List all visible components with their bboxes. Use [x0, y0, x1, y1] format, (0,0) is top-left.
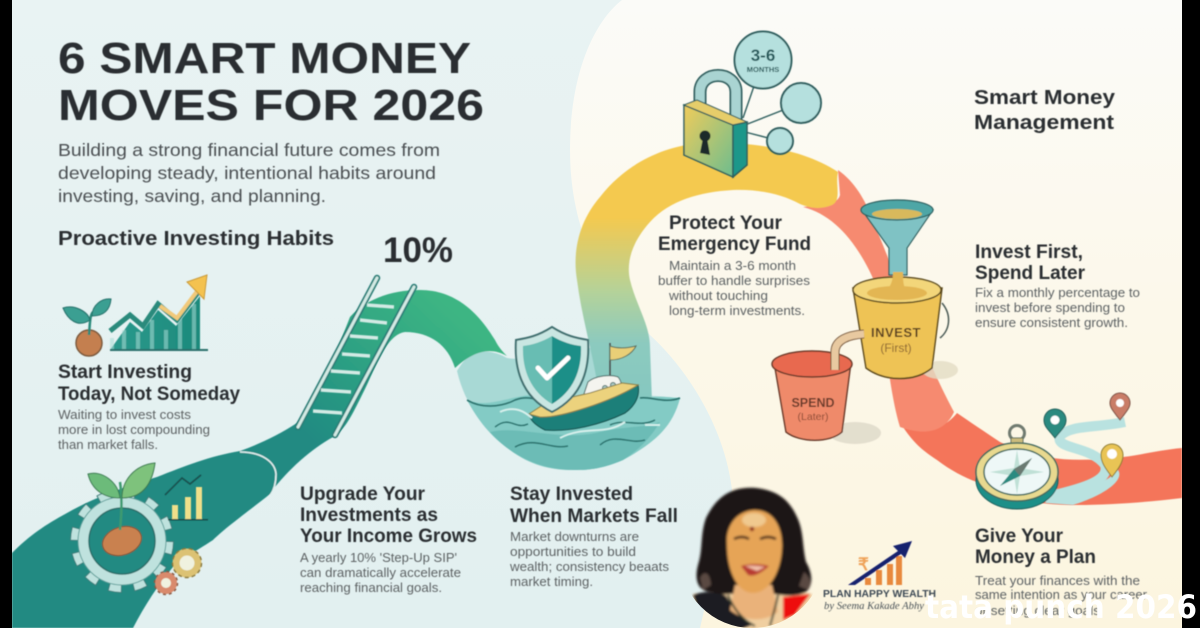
text block: start investing: than market falls.: [58, 437, 158, 452]
icon: spend bucket: SPEND: [791, 396, 835, 410]
ribbon: coral upper section: [803, 170, 954, 432]
text block: invest first: ensure consistent growth.: [975, 315, 1128, 330]
text block: protect emergency fund: [658, 212, 811, 318]
title: [58, 34, 484, 130]
icon: spend bucket: (Later): [798, 411, 828, 423]
text block: upgrade investments: Upgrade Your: [300, 483, 425, 505]
stat: 10%: 10%: [383, 231, 453, 270]
text block: stay invested: When Markets Fall: [510, 505, 678, 527]
logo: plan happy wealth: ₹: [858, 555, 869, 574]
text block: stay invested: Stay Invested: [510, 483, 633, 505]
ribbon: water deep wave: [490, 422, 660, 470]
title: MOVES FOR 2026: [58, 81, 484, 130]
icon: funnel and invest bucket: INVEST: [871, 325, 921, 340]
text block: upgrade investments: Your Income Grows: [300, 525, 477, 547]
text block: give your money a plan: Money a Plan: [975, 546, 1096, 568]
ribbon path: [12, 143, 1182, 628]
text block: stay invested: Market downturns are: [510, 529, 639, 544]
background: cool left side: [0, 0, 732, 628]
icon: padlock with month bubbles: [684, 32, 821, 177]
logo: plan happy wealth: [823, 541, 936, 612]
text block: protect emergency fund: buffer to handle surprises: [658, 273, 811, 288]
icon: ladder: [298, 278, 414, 435]
text block: stay invested: market timing.: [510, 574, 593, 589]
ribbon: teal lower section: [12, 451, 276, 628]
icon: funnel and invest bucket: [835, 200, 958, 379]
icon: gear with seedling: [76, 463, 208, 594]
text block: invest first: Fix a monthly percentage to: [975, 285, 1140, 300]
ribbon: pale teal bowl: [457, 345, 680, 470]
text block: invest first: Spend Later: [975, 262, 1085, 284]
text block: upgrade investments: [300, 483, 477, 595]
text block: smart money management: Smart Money: [974, 87, 1116, 109]
icon: padlock with month bubbles: 3-6: [751, 46, 775, 65]
intro text: developing steady, intentional habits around: [58, 163, 436, 183]
text block: upgrade investments: reaching financial goals.: [300, 580, 442, 595]
text block: protect emergency fund: long-term investments.: [669, 303, 805, 318]
text block: smart money management: [974, 87, 1116, 134]
text block: protect emergency fund: without touching: [668, 288, 768, 303]
title: 6 SMART MONEY: [58, 34, 471, 83]
icon: spend bucket: [772, 351, 881, 444]
text block: give your money a plan: same intention as your career: [975, 587, 1148, 602]
text block: upgrade investments: can dramatically accelerate: [300, 565, 461, 580]
icon: funnel and invest bucket: (First): [880, 341, 912, 355]
icon: compass and winding road: [976, 393, 1130, 509]
text block: smart money management: Management: [974, 112, 1114, 134]
text block: start investing: [58, 361, 240, 452]
text block: stay invested: [509, 483, 678, 589]
text block: upgrade investments: Investments as: [300, 504, 438, 526]
intro text: investing, saving, and planning.: [58, 186, 326, 206]
icon: shield and boat on waves: [467, 327, 680, 447]
logo: plan happy wealth: PLAN HAPPY WEALTH: [823, 588, 936, 600]
text block: give your money a plan: Treat your finances with the: [975, 573, 1140, 588]
text block: invest first: Invest First,: [975, 241, 1083, 263]
icon: padlock with month bubbles: MONTHS: [747, 65, 779, 74]
ribbon: coral lower section: [903, 413, 1182, 505]
icon: sprout and rising chart: [63, 275, 208, 356]
text block: protect emergency fund: Maintain a 3-6 month: [669, 258, 796, 273]
text block: start investing: Start Investing: [58, 361, 192, 383]
ribbon: green hump: [240, 290, 507, 493]
logo: plan happy wealth: by Seema Kakade Abhy: [824, 601, 924, 612]
portrait photo: [693, 488, 812, 628]
text block: start investing: more in lost compounding: [58, 422, 210, 437]
intro text: Building a strong financial future comes from: [58, 140, 440, 160]
ribbon: gradient arch: [576, 143, 838, 402]
ribbon: water: [467, 395, 680, 470]
text block: invest first: [975, 241, 1140, 330]
text block: start investing: Waiting to invest costs: [58, 407, 192, 422]
text block: start investing: Today, Not Someday: [58, 383, 240, 405]
text block: stay invested: opportunities to build: [510, 544, 636, 559]
text block: protect emergency fund: Emergency Fund: [658, 233, 811, 255]
text block: give your money a plan: or setting clear goals: [975, 603, 1101, 618]
text block: give your money a plan: Give Your: [975, 525, 1063, 547]
text block: invest first: invest before spending to: [975, 300, 1125, 315]
section heading: proactive investing habits: Proactive Investing Habits: [58, 228, 334, 250]
text block: give your money a plan: [975, 525, 1148, 618]
text block: upgrade investments: A yearly 10% 'Step-Up SIP': [300, 550, 457, 565]
intro text: [58, 140, 440, 206]
text block: protect emergency fund: Protect Your: [669, 212, 782, 234]
ribbon: notch highlight: [240, 452, 276, 496]
text block: stay invested: wealth; consistency beaats: [509, 559, 670, 574]
